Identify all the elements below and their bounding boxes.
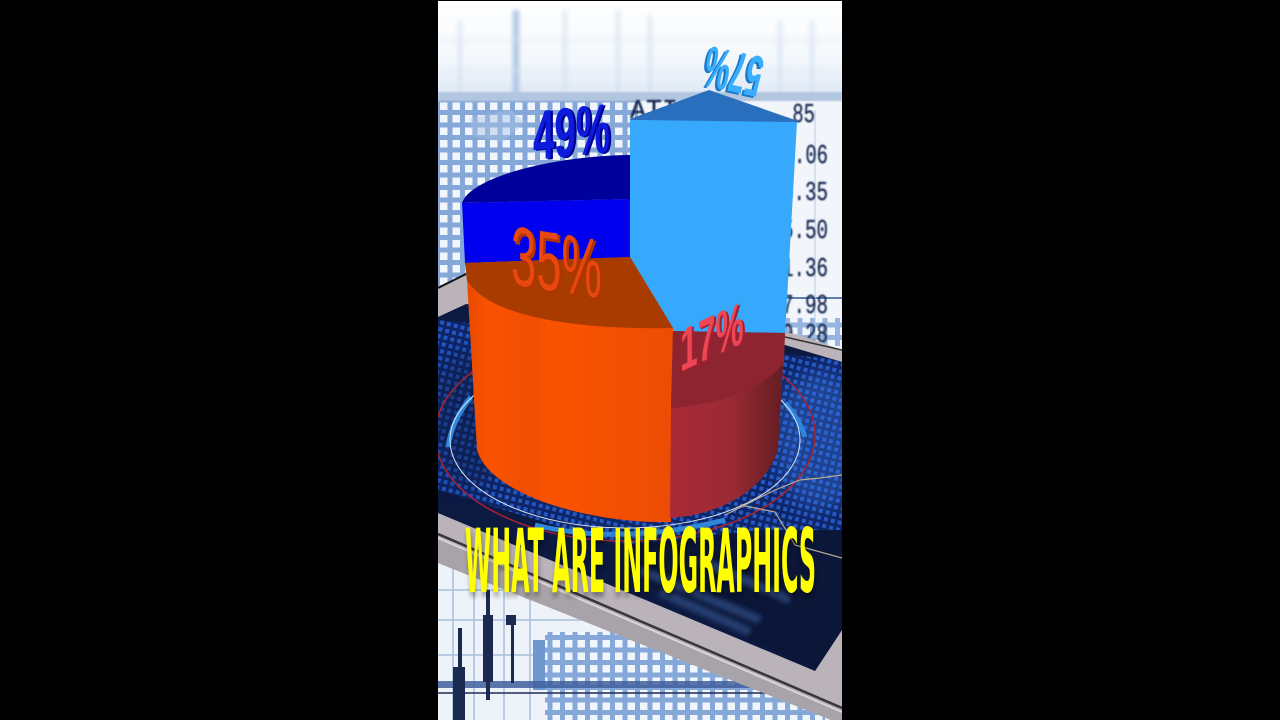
candlesticks <box>453 590 516 720</box>
screen rings <box>435 329 815 541</box>
label: 57% <box>704 46 764 98</box>
slice: light blue 57% <box>630 90 798 335</box>
market numbers: .06 <box>794 142 828 172</box>
market numbers: 5.50 <box>782 217 828 247</box>
infographic video frame <box>438 1 842 720</box>
label: 35%: 35% <box>513 212 604 319</box>
slice: orange 35% <box>465 257 673 522</box>
label: 17%: 17% <box>682 291 746 386</box>
market numbers: ATI <box>630 97 678 127</box>
market numbers: 5.35 <box>782 179 828 209</box>
market numbers <box>630 97 828 351</box>
label: 49%: 49% <box>535 90 612 176</box>
dotted world map panel left <box>438 100 638 290</box>
slice: maroon 17% <box>670 331 785 518</box>
label: 57%: 57% <box>698 34 769 110</box>
trend lines <box>725 475 842 558</box>
3D pie chart <box>462 90 798 522</box>
label: 57%: 57% <box>696 35 766 112</box>
label: 35%: 35% <box>511 210 602 317</box>
label: 49%: 49% <box>533 89 610 175</box>
label: 35% <box>512 227 600 298</box>
tablet body <box>438 274 842 720</box>
tablet screen <box>438 304 842 671</box>
market numbers: 7.98 <box>782 292 828 322</box>
dotted panel right <box>786 318 842 346</box>
market numbers: 1.36 <box>782 255 828 285</box>
market numbers: .85 <box>781 101 815 131</box>
market numbers: 9.28 <box>782 321 828 351</box>
slice: blue 49% <box>462 155 630 263</box>
label: 17%: 17% <box>680 290 744 385</box>
background: financial data backdrop <box>438 0 842 720</box>
label: 49% <box>534 104 612 160</box>
lower chart area <box>438 563 831 720</box>
